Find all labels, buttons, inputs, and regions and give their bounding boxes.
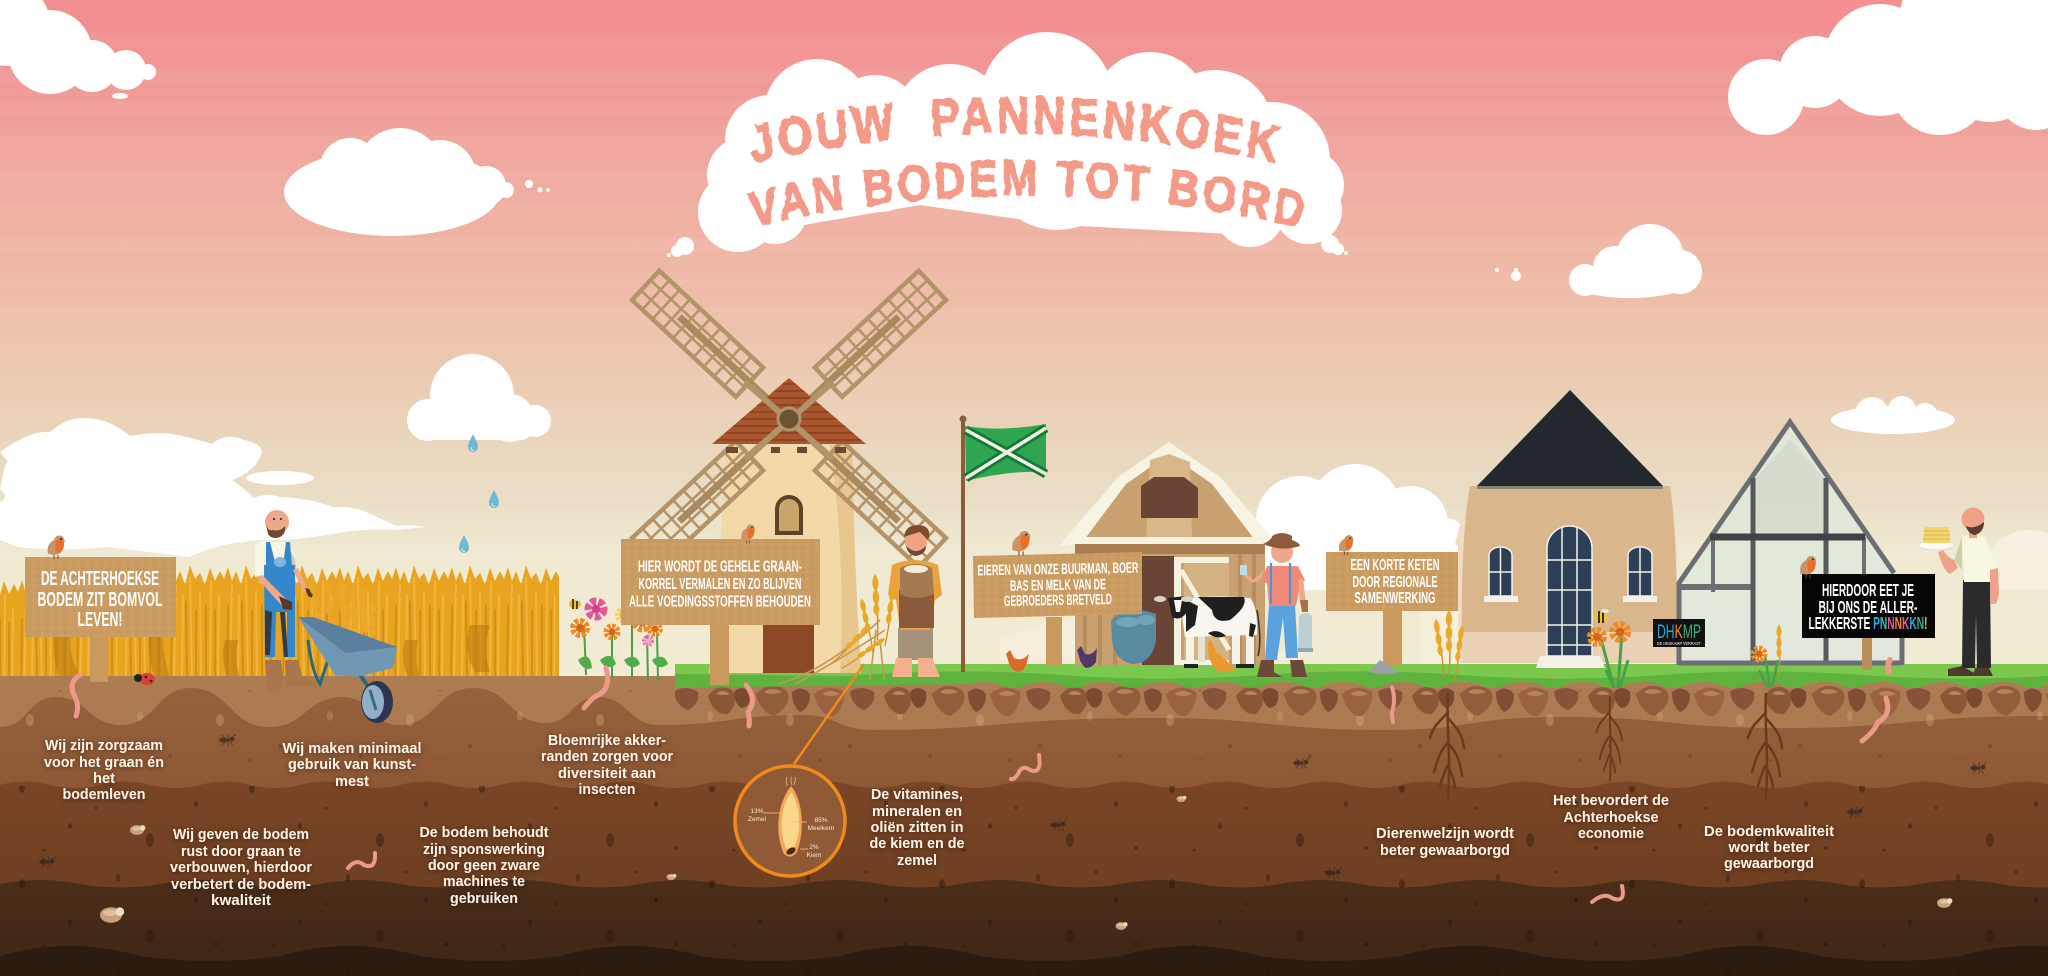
soil creatures — [39, 734, 1987, 930]
text: dierenwelzijn — [1376, 826, 1514, 859]
windmill — [632, 271, 946, 673]
mill door — [763, 625, 814, 673]
sign: De Achterhoekse bodem: LEVEN! — [78, 609, 122, 631]
cloud: top left — [0, 0, 156, 99]
sign: De Achterhoekse bodem: DE ACHTERHOEKSE — [41, 568, 159, 590]
text: akkerranden: diversiteit aan — [558, 766, 656, 782]
cow — [1154, 596, 1260, 668]
worms in topsoil — [72, 668, 1888, 902]
text: sponswerking — [420, 825, 549, 907]
text: bodemkwaliteit: wordt beter — [1727, 840, 1810, 856]
text: akkerranden: Bloemrijke akker- — [548, 733, 666, 749]
text: kunstmest: Wij maken minimaal — [282, 741, 422, 757]
text: sponswerking: machines te — [443, 874, 525, 890]
DHKMP sign: DHKMP — [1657, 622, 1701, 643]
heading text: VAN BODEM TOT BORD — [746, 158, 1304, 226]
text: dierenwelzijn: beter gewaarborgd — [1380, 843, 1510, 859]
mill sails — [632, 271, 946, 567]
DHKMP sign: DE HESKAMP VERRAST — [1657, 641, 1701, 646]
bee near house — [1594, 609, 1609, 623]
sign: korte keten: DOOR REGIONALE — [1352, 574, 1438, 591]
text: vitamines — [870, 787, 964, 869]
cloud: far right horizon — [1990, 530, 2048, 590]
cloud: top right — [1728, 0, 2048, 135]
grey rock — [1369, 660, 1397, 674]
distant pale hills — [1000, 580, 1900, 665]
sign: graankorrel: HIER WORDT DE GEHELE GRAAN- — [638, 558, 802, 576]
sign: De Achterhoekse bodem — [25, 557, 176, 682]
sign: korte keten — [1326, 552, 1465, 666]
text: economie: economie — [1578, 826, 1644, 842]
text: bodemkwaliteit: gewaarborgd — [1724, 856, 1814, 872]
cloud: upper left centre — [284, 128, 550, 236]
text: vitamines: oliën zitten in — [870, 820, 964, 836]
sign: korte keten: SAMENWERKING — [1354, 590, 1436, 607]
worm poking out — [1888, 660, 1890, 672]
text: economie — [1553, 793, 1669, 842]
mill roof — [712, 378, 866, 459]
text: vitamines: De vitamines, — [871, 787, 963, 803]
sign: lekkerste pannenkoeken: LEKKERSTE PNNNKKN! — [1808, 613, 1928, 633]
farmhouse — [1455, 390, 1677, 668]
milk churns — [1111, 610, 1156, 664]
sign: korte keten: EEN KORTE KETEN — [1350, 557, 1440, 574]
text: bodem rust: kwaliteit — [211, 893, 271, 909]
soil layers — [0, 676, 2048, 976]
sign: lekkerste pannenkoeken: BIJ ONS DE ALLER- — [1818, 597, 1918, 617]
text: akkerranden: randen zorgen voor — [541, 749, 673, 765]
barn — [1058, 442, 1274, 665]
text: bodemkwaliteit — [1704, 824, 1834, 872]
icon: robin on keten sign — [1339, 535, 1353, 555]
text: kunstmest — [282, 741, 422, 790]
text: vitamines: de kiem en de — [870, 836, 964, 852]
text: zorgzaam: het — [93, 771, 115, 787]
small cloud right of title — [1321, 235, 1348, 255]
text: sponswerking: zijn sponswerking — [423, 842, 545, 858]
text: dierenwelzijn: Dierenwelzijn wordt — [1376, 826, 1514, 842]
text: sponswerking: gebruiken — [450, 891, 518, 907]
cloud: right small — [1831, 396, 1955, 434]
text: bodemkwaliteit: De bodemkwaliteit — [1704, 824, 1834, 840]
sign: graankorrel: KORREL VERMALEN EN ZO BLIJVEN — [638, 576, 802, 593]
mill window — [777, 497, 801, 533]
text: economie: Achterhoekse — [1564, 810, 1658, 826]
wheat bunch with stems — [779, 574, 896, 684]
icon: robin on mill sign — [741, 525, 755, 543]
house windows — [1489, 526, 1652, 656]
text: bodem rust — [170, 827, 312, 909]
grain kernel circle — [735, 664, 864, 876]
text: akkerranden — [541, 733, 673, 798]
sign: eieren en melk: GEBROEDERS BRETVELD — [1004, 591, 1112, 610]
wheat field — [0, 565, 559, 680]
sign: De Achterhoekse bodem: BODEM ZIT BOMVOL — [38, 589, 162, 611]
text: sponswerking: De bodem behoudt — [420, 825, 549, 841]
text: zorgzaam — [44, 738, 164, 803]
text: zorgzaam: Wij zijn zorgzaam — [45, 738, 163, 754]
flower border with bee — [569, 597, 668, 680]
kernel — [778, 786, 802, 857]
sign: graankorrel — [621, 539, 820, 685]
kernel labels: 85% — [814, 817, 828, 824]
kernel labels: 13% — [750, 808, 764, 815]
title cloud with heading — [667, 32, 1348, 257]
text: vitamines: mineralen en — [872, 804, 962, 820]
text: bodem rust: verbetert de bodem- — [171, 877, 311, 893]
text: bodem rust: Wij geven de bodem — [173, 827, 309, 843]
sign: eieren en melk: EIEREN VAN ONZE BUURMAN, BOER — [977, 560, 1139, 579]
chickens — [1006, 640, 1236, 672]
icon: bird on barn sign — [1012, 531, 1030, 556]
farmer with overalls — [255, 510, 317, 693]
kernel labels — [748, 808, 835, 859]
heading text — [746, 95, 1304, 226]
daffodil plant — [1591, 625, 1628, 688]
kernel labels: 2% — [809, 844, 819, 851]
body texts — [44, 733, 1834, 909]
text: zorgzaam: bodemleven — [62, 787, 146, 803]
plants and roots — [1430, 610, 1890, 799]
flag — [960, 416, 1046, 672]
text: vitamines: zemel — [897, 853, 937, 869]
cloud: big left horizon — [0, 418, 426, 557]
sign: lekkerste pannenkoeken: HIERDOOR EET JE — [1822, 580, 1914, 600]
greenhouse — [1679, 422, 1902, 665]
text: bodem rust: rust door graan te — [181, 844, 301, 860]
miller figure — [888, 525, 942, 677]
mill tower — [709, 445, 861, 673]
cloud: raining cloud — [407, 354, 551, 442]
text: bodem rust: verbouwen, hierdoor — [170, 860, 312, 876]
sign: eieren en melk — [973, 552, 1142, 665]
farmer with milk — [1240, 533, 1313, 677]
icon: robin on black sign — [1800, 556, 1816, 578]
text: akkerranden: insecten — [578, 782, 636, 798]
small cloud left of title — [667, 237, 694, 257]
text: kunstmest: gebruik van kunst- — [288, 757, 416, 773]
heading text: JOUW PANNENKOEK — [750, 95, 1282, 164]
text: kunstmest: mest — [335, 774, 369, 790]
sky background — [0, 0, 2048, 700]
sign: lekkerste pannenkoeken — [1802, 574, 1935, 670]
sign: graankorrel: ALLE VOEDINGSSTOFFEN BEHOUDEN — [629, 594, 811, 610]
kernel labels: Zemel — [748, 816, 767, 823]
sign: eieren en melk: BAS EN MELK VAN DE — [1010, 576, 1106, 595]
text: zorgzaam: voor het graan én — [44, 755, 164, 771]
cloud: behind barn — [1255, 464, 1467, 590]
roots — [1430, 694, 1782, 799]
wheat and flower plant — [1754, 624, 1782, 688]
wheat plant — [1433, 610, 1465, 682]
kernel labels: Kiem — [807, 852, 821, 859]
text: economie: Het bevordert de — [1553, 793, 1669, 809]
icon: robin on sign 1 — [48, 536, 65, 559]
wheelbarrow with wheat — [298, 576, 397, 723]
text: sponswerking: door geen zware — [428, 858, 540, 874]
cloud: upper right — [1495, 224, 1702, 298]
grass strip with stones — [675, 664, 2048, 716]
raindrops — [459, 434, 509, 788]
DHKMP sign — [1653, 619, 1705, 647]
kernel labels: Meelkern — [808, 825, 835, 832]
icon: ladybug — [134, 673, 155, 685]
man with pancakes — [1918, 508, 1999, 676]
